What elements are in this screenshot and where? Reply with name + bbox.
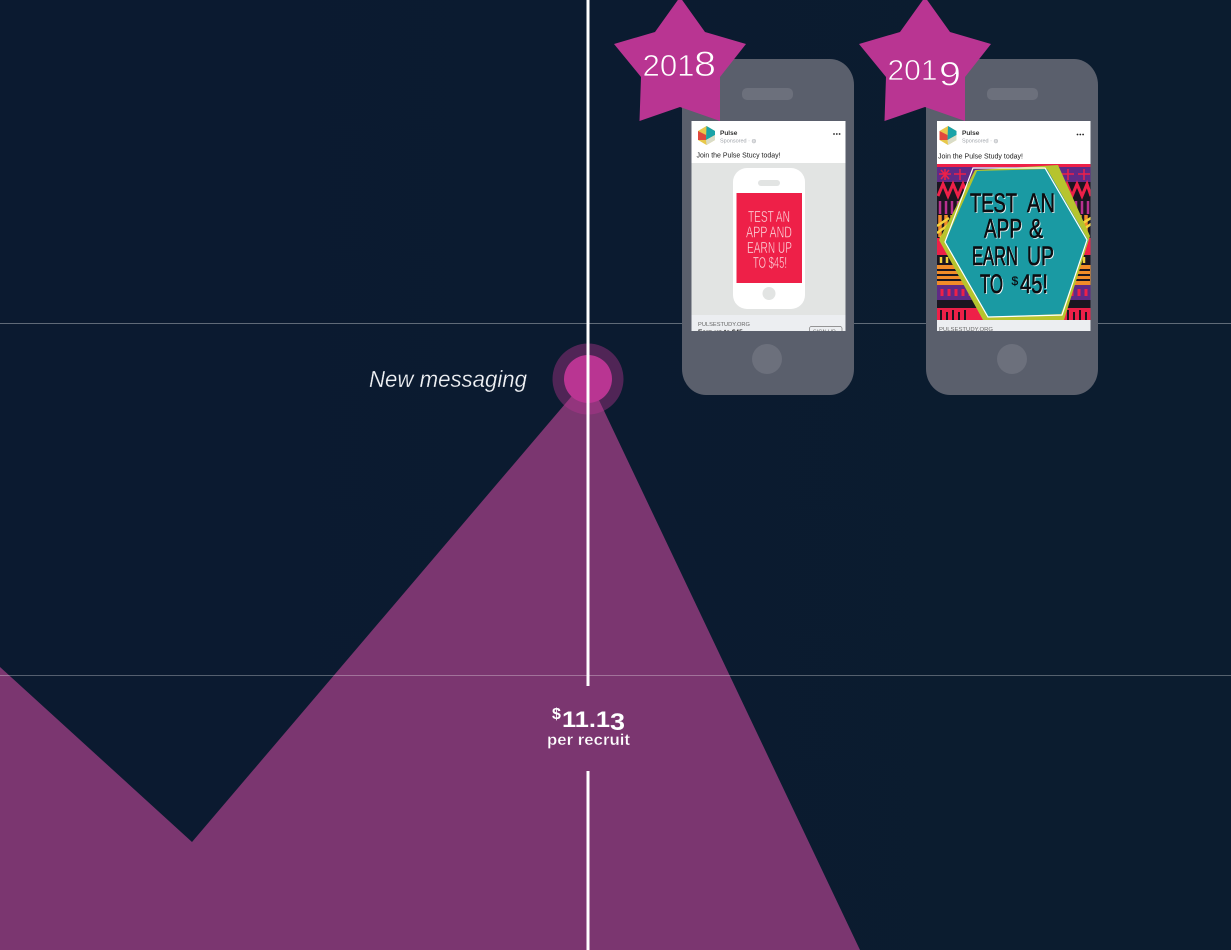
facebook ad 2018: SIGN UP bbox=[813, 330, 836, 336]
phone: 2018 ad bbox=[682, 59, 854, 395]
ad headline: TO bbox=[981, 270, 1004, 300]
inner phone illustration: TEST AN bbox=[748, 209, 790, 226]
facebook ad 2019: Join the Pulse Study today! bbox=[938, 154, 1023, 160]
value: cost per recruit: $ bbox=[552, 706, 561, 723]
ad headline bbox=[970, 193, 1054, 294]
facebook ad 2019: Pulse bbox=[962, 130, 980, 137]
facebook ad 2019 bbox=[937, 121, 1091, 333]
badge: 2019 star: 9 bbox=[939, 56, 961, 94]
badge: 2019 star bbox=[859, 0, 991, 121]
value: cost per recruit: per recruit bbox=[547, 732, 631, 749]
menu dots bbox=[833, 133, 840, 135]
inner phone illustration: EARN UP bbox=[747, 240, 792, 257]
ad headline: AN bbox=[1028, 189, 1056, 219]
facebook ad 2018: Join the Pulse Stucy today! bbox=[696, 152, 781, 160]
badge: 2018 star: 201 bbox=[642, 48, 694, 83]
badge: 2018 star: 8 bbox=[694, 45, 716, 84]
ad headline: UP bbox=[1028, 242, 1055, 272]
ad headline: & bbox=[1030, 214, 1044, 244]
logo: pulse bbox=[698, 126, 715, 145]
value: cost per recruit bbox=[547, 706, 631, 749]
ad headline: TEST bbox=[971, 189, 1018, 219]
ad headline: 45! bbox=[1020, 269, 1048, 299]
ad headline: TO bbox=[980, 269, 1003, 299]
area chart: cost per recruit bbox=[0, 377, 860, 950]
inner phone illustration: TO $45! bbox=[753, 255, 787, 272]
badge: 2019 star: 201 bbox=[888, 55, 938, 87]
logo: pulse bbox=[940, 126, 956, 145]
menu dots bbox=[1077, 134, 1084, 135]
facebook ad 2019: Sponsored · ◍ bbox=[962, 138, 998, 144]
facebook ad 2018: Sponsored · ◍ bbox=[720, 138, 756, 144]
data point marker bbox=[552, 344, 624, 414]
value: cost per recruit: 3 bbox=[610, 709, 625, 736]
ad headline: $ bbox=[1012, 274, 1018, 288]
badge: 2018 star bbox=[614, 0, 746, 121]
inner phone illustration bbox=[733, 168, 805, 309]
inner phone illustration: APP AND bbox=[746, 224, 792, 242]
ad headline: TEST bbox=[970, 188, 1017, 218]
ad headline: AN bbox=[1027, 188, 1055, 218]
facebook ad 2018: Pulse bbox=[720, 130, 738, 137]
ad headline: UP bbox=[1027, 241, 1054, 271]
ad headline: & bbox=[1029, 214, 1043, 244]
ad headline: 45! bbox=[1021, 270, 1049, 300]
timeline axis bbox=[586, 0, 590, 950]
ad headline: EARN bbox=[973, 242, 1019, 272]
facebook ad 2018: PULSESTUDY.ORG bbox=[698, 322, 750, 328]
label: new messaging: New messaging bbox=[369, 366, 527, 392]
ad headline: APP bbox=[984, 214, 1022, 244]
ad headline: APP bbox=[985, 214, 1023, 244]
teal hexagon bbox=[945, 169, 1088, 317]
phone: 2019 ad bbox=[926, 59, 1098, 395]
value: cost per recruit: 11.1 bbox=[562, 707, 610, 732]
lime shape bbox=[939, 165, 1090, 320]
facebook ad 2018: Earn up to $45 bbox=[698, 329, 743, 336]
ad artwork: patterned background bbox=[937, 164, 1091, 320]
facebook ad 2019: PULSESTUDY.ORG bbox=[939, 327, 993, 333]
ad headline: EARN bbox=[972, 241, 1018, 271]
facebook ad 2018 bbox=[692, 121, 846, 338]
